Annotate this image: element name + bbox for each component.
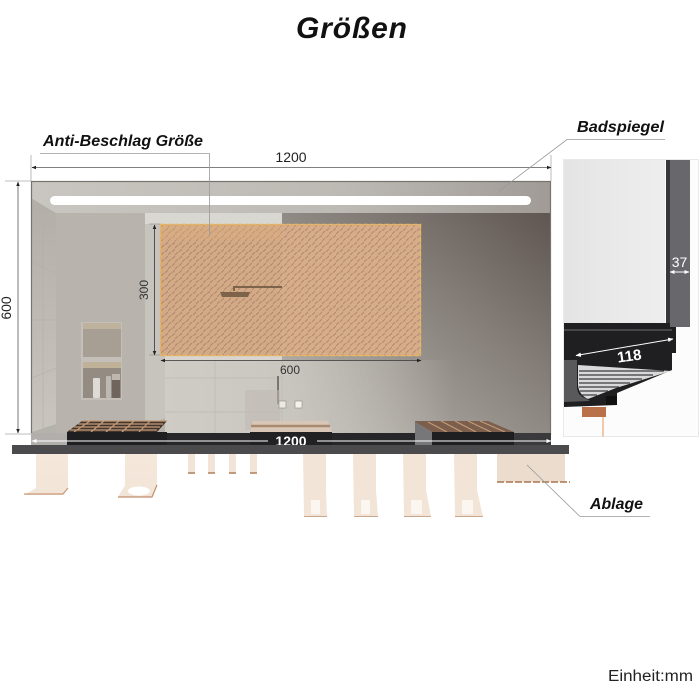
dimension: mirror width 1200: 1200 — [275, 149, 307, 165]
LED light strip — [50, 196, 531, 205]
dimension: anti-fog height 300 — [137, 224, 160, 355]
panel: profile detail — [564, 160, 698, 437]
dimension: depth 118 — [576, 339, 673, 367]
heading: Badspiegel: Badspiegel — [577, 119, 665, 136]
tall hook tips — [304, 516, 483, 518]
dimension: frame 37: 37 — [672, 254, 687, 270]
centre wall — [145, 213, 282, 360]
frame side — [666, 160, 690, 327]
tall hook 2 — [353, 454, 378, 517]
column — [145, 213, 165, 428]
dimension: depth 118: 118 — [616, 346, 643, 367]
left lip — [564, 360, 590, 402]
basket right — [415, 421, 514, 445]
shelf board — [12, 445, 569, 454]
touch icons — [279, 401, 286, 408]
heading: Anti-Beschlag Größe: Anti-Beschlag Größe — [42, 133, 203, 150]
mirror glass — [564, 160, 665, 323]
tall hook 3 — [403, 454, 431, 517]
back wall left — [56, 213, 146, 434]
icon: wall niche with bottles — [81, 322, 122, 400]
panel: shelf — [12, 421, 569, 454]
side wall — [32, 199, 56, 432]
dimension: shelf width 1200: 1200 — [275, 433, 307, 449]
small hook tips — [188, 472, 257, 474]
panel: bathroom mirror — [31, 181, 551, 434]
icon: shower head — [234, 287, 282, 291]
leader: Badspiegel — [499, 140, 665, 191]
dimension: mirror height 600 — [0, 181, 31, 434]
bracket 2 with hole — [118, 454, 157, 497]
tall hook 4 — [454, 454, 483, 517]
tall hook 1 — [303, 454, 327, 517]
basket left — [67, 421, 167, 445]
leader: Anti-Beschlag — [40, 154, 210, 235]
heading: Ablage: Ablage — [589, 496, 643, 513]
dimension: anti-fog height 300: 300 — [137, 280, 151, 300]
ribbed tray — [578, 365, 671, 399]
tap — [277, 376, 279, 404]
dark shelf body — [67, 433, 551, 445]
brackets and hooks — [24, 454, 570, 517]
dimension: mirror width 1200 — [31, 149, 551, 181]
dark profile body — [564, 323, 676, 407]
anti-fog area — [160, 224, 421, 356]
towel rail box — [497, 454, 570, 482]
dimension: anti-fog width 600: 600 — [280, 363, 300, 377]
right wall — [282, 213, 551, 434]
mirror frame — [32, 182, 550, 434]
clip and copper foot — [606, 396, 617, 405]
top band — [31, 182, 551, 213]
soap tray — [250, 421, 332, 445]
title: Größen — [296, 12, 407, 45]
small hooks — [188, 454, 257, 473]
unit note: Einheit:mm — [608, 668, 693, 685]
lower wall tiles — [165, 360, 455, 434]
leader: Ablage — [527, 465, 650, 516]
bracket 1 — [24, 454, 68, 495]
